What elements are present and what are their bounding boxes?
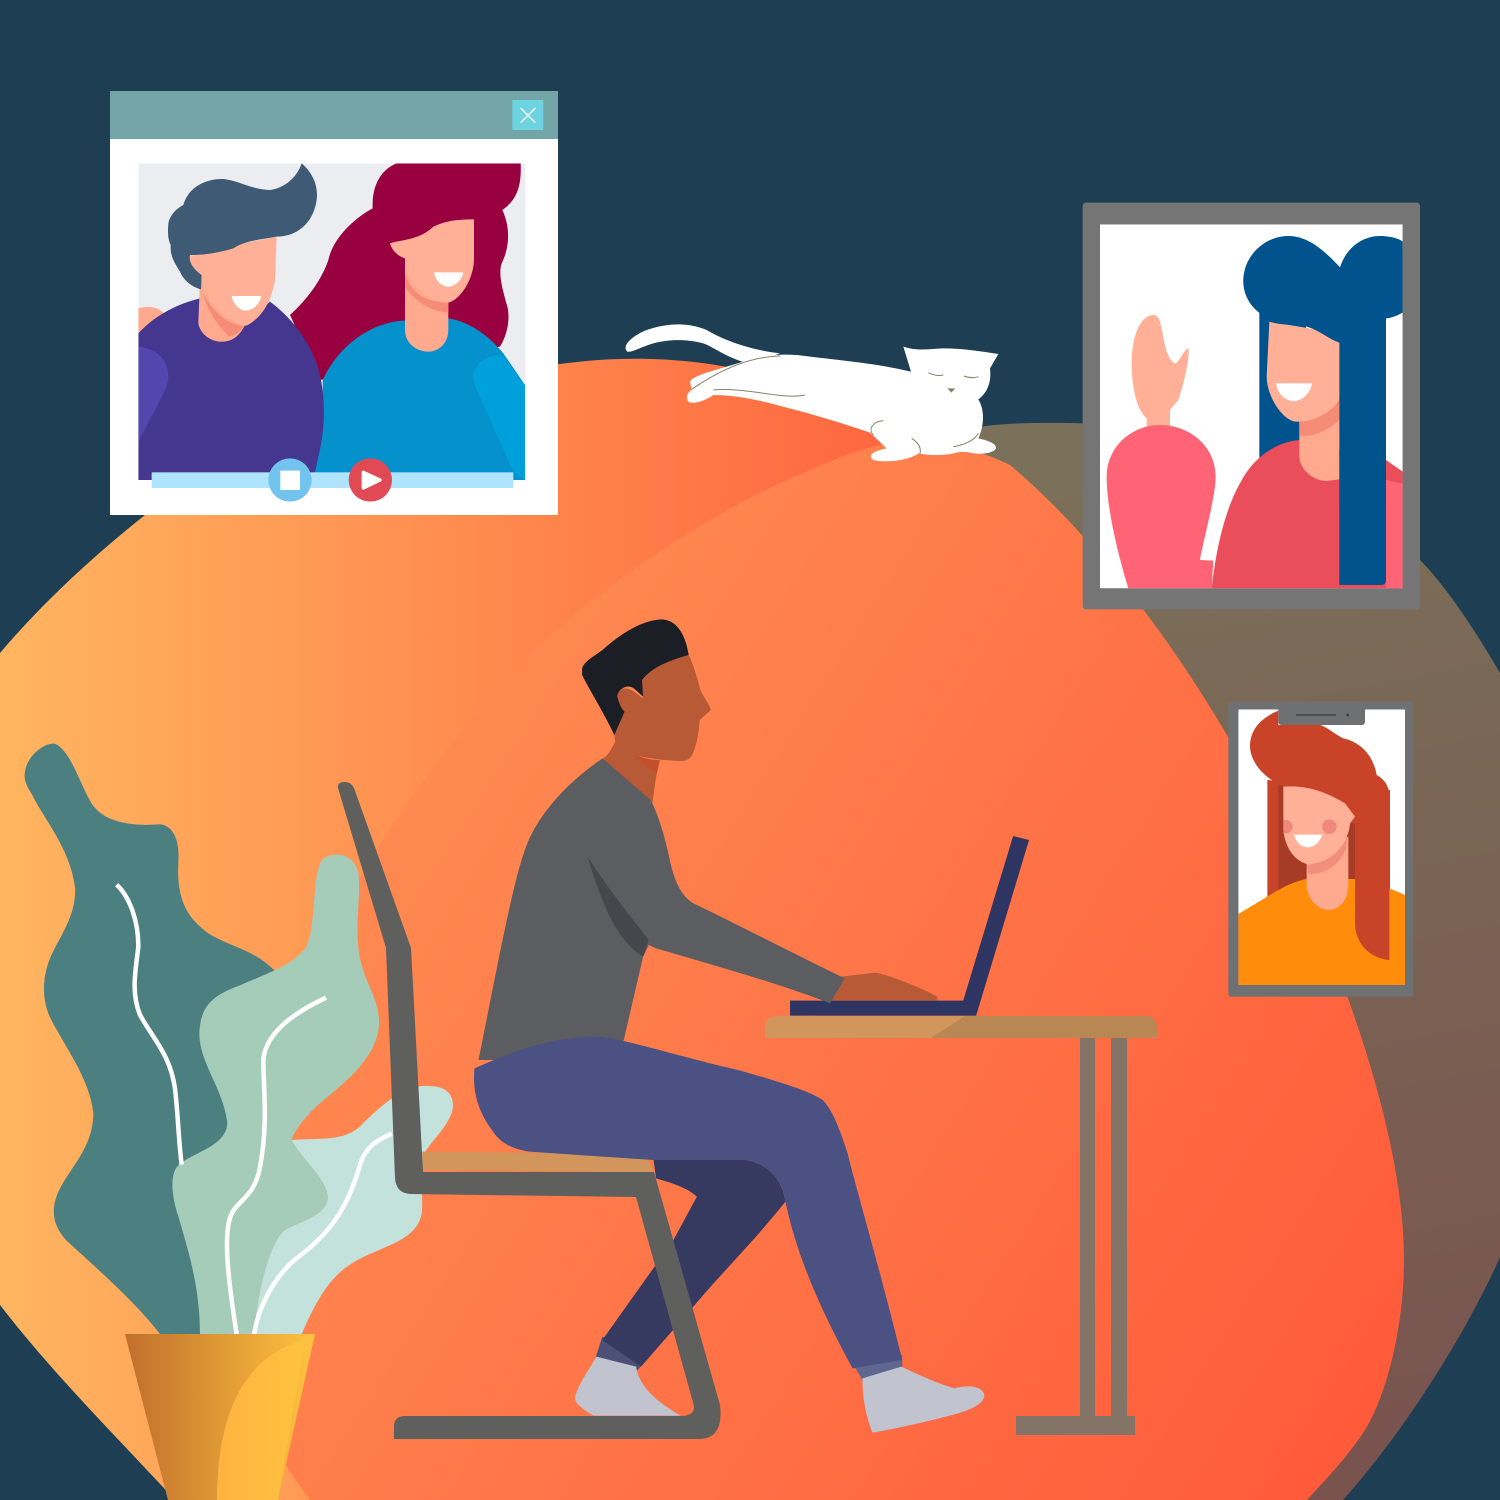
pot [125, 1334, 315, 1500]
back blob: orange [0, 359, 1200, 1500]
back trouser [602, 1160, 785, 1367]
picture frame: waving woman [1083, 203, 1420, 609]
neck [1307, 837, 1348, 910]
woman sweater [313, 318, 525, 480]
upper body [478, 619, 937, 1060]
hair [582, 619, 689, 735]
sweater [478, 758, 845, 1060]
hair top [1243, 236, 1403, 585]
desk top [765, 1016, 965, 1038]
desk legs [1016, 1038, 1135, 1435]
face [1283, 786, 1355, 864]
close button [512, 100, 543, 130]
smile [1276, 383, 1312, 401]
tail [626, 324, 780, 363]
play button [349, 458, 392, 502]
seated man at laptop [338, 619, 1029, 1439]
hand [828, 973, 937, 1001]
leaf veins [117, 885, 392, 1334]
window title bar [110, 91, 558, 139]
hair top [1250, 711, 1389, 960]
mint leaf [172, 855, 379, 1334]
window body [110, 91, 558, 515]
potted plant [25, 744, 453, 1500]
chair seat [422, 1152, 655, 1172]
cat line details [692, 356, 978, 453]
face [1267, 322, 1339, 422]
laptop [790, 836, 1029, 1016]
front leg [474, 1037, 984, 1433]
front shoe [862, 1367, 984, 1433]
stop button [268, 458, 312, 502]
frame border [1083, 203, 1420, 609]
underarm shadow [588, 857, 649, 957]
leaves [25, 744, 453, 1334]
dark leaf [25, 744, 277, 1334]
pale leaf [253, 1086, 453, 1334]
video call window [110, 91, 558, 515]
raised arm [1107, 425, 1216, 588]
chair frame [338, 782, 721, 1439]
front blob: orange [230, 443, 1404, 1500]
phone screen [1238, 709, 1405, 985]
sleeping white cat [626, 324, 998, 461]
woman hair [290, 163, 521, 380]
desk [765, 1016, 1157, 1435]
back leg [575, 1160, 785, 1416]
sweater [1238, 879, 1405, 985]
phone: smiling woman [1228, 702, 1413, 997]
neck [601, 742, 660, 803]
phone body [1228, 702, 1413, 997]
playback bar [152, 472, 513, 488]
body [687, 347, 998, 461]
sweater [1212, 440, 1403, 588]
frame picture [1100, 224, 1403, 588]
back hair [1259, 310, 1306, 460]
back shoe [575, 1357, 681, 1416]
webcam clip [1278, 702, 1365, 725]
back hair [1267, 780, 1390, 898]
man sweater [138, 298, 324, 480]
face [614, 655, 711, 761]
back sock [595, 1337, 644, 1372]
smile [1294, 835, 1322, 847]
waving hand [1132, 315, 1189, 427]
video frame: couple [138, 163, 525, 480]
back blob: olive shadow [900, 423, 1500, 1500]
neck shadow [633, 754, 660, 773]
neck [1299, 397, 1339, 481]
front trouser [474, 1037, 902, 1368]
man hair [168, 163, 317, 289]
cheeks [1279, 819, 1337, 834]
man neck and face [189, 237, 277, 342]
woman neck and face [390, 219, 474, 352]
front sock [853, 1355, 902, 1382]
